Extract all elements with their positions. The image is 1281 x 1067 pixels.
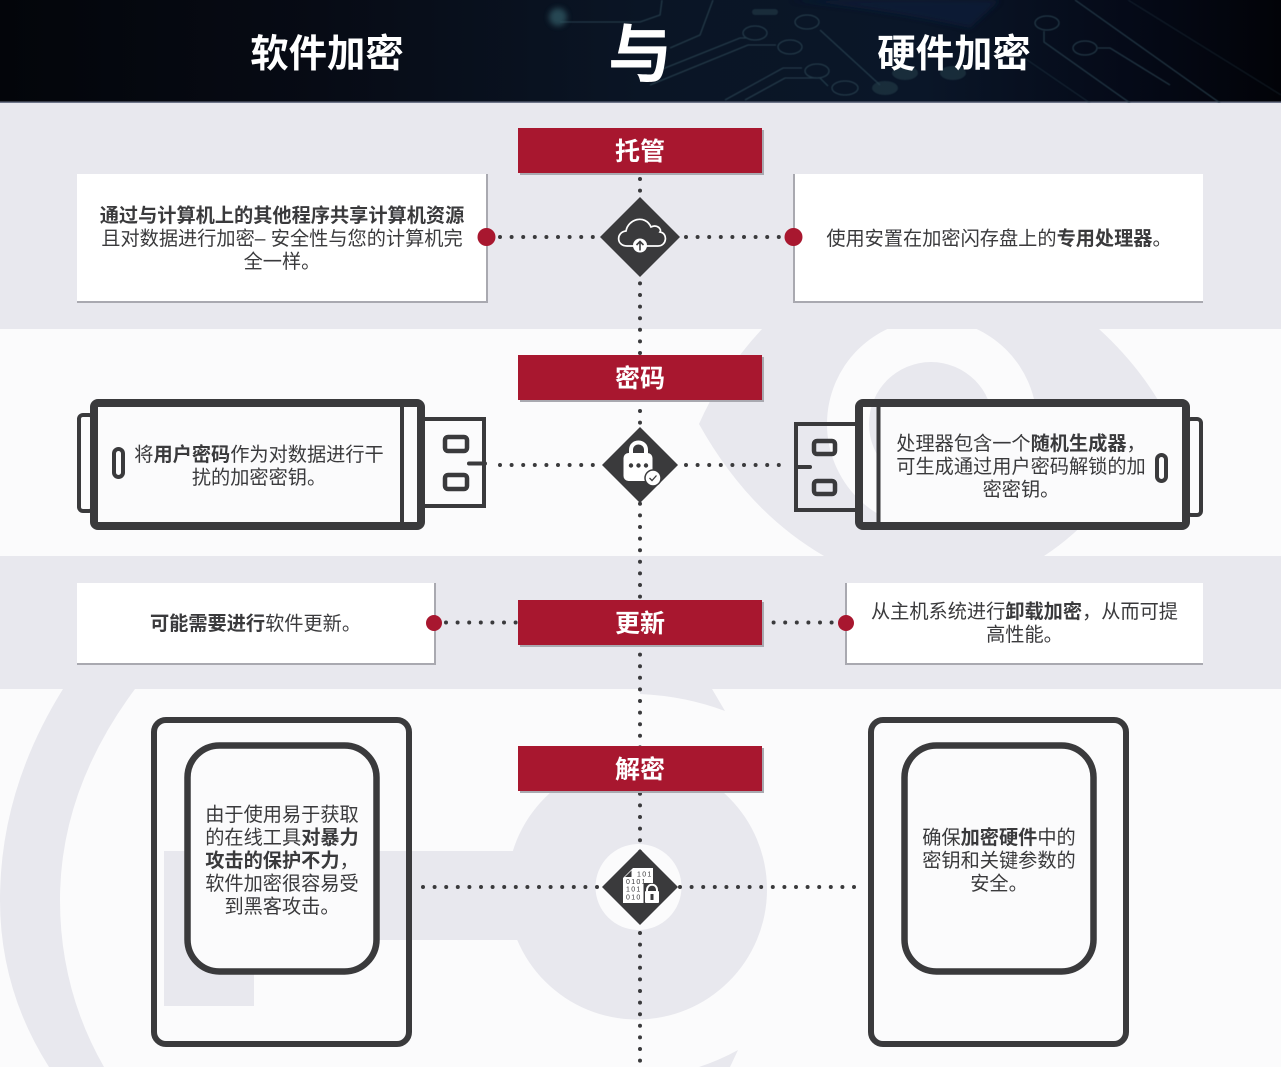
text: hosting hardware: 使用安置在加密闪存盘上的专用处理器。 <box>826 229 1172 250</box>
text: hardware decryption: 密钥和关键参数的 <box>922 850 1076 872</box>
banner: decryption: 解密 <box>615 756 665 784</box>
text: software password: 将用户密码作为对数据进行干 <box>134 444 384 466</box>
panel: update software <box>77 583 436 664</box>
usb drive: hardware password <box>794 399 1203 530</box>
text: software decryption: 软件加密很容易受 <box>205 874 359 894</box>
banner: password: 密码 <box>615 365 665 393</box>
icon: binary file lock diamond: 101 <box>637 872 653 878</box>
panel: software decryption device <box>151 717 412 1047</box>
text: hardware decryption: 安全。 <box>970 874 1028 894</box>
icon: cloud upload diamond <box>600 197 680 277</box>
icon: binary file lock diamond: 010 <box>626 894 642 902</box>
icon: binary file lock diamond <box>602 849 678 925</box>
text: hosting software: 且对数据进行加密– 安全性与您的计算机完 <box>101 229 463 250</box>
panel: hardware decryption device <box>868 717 1129 1047</box>
banner: hosting <box>518 128 762 173</box>
icon: lock diamond <box>602 427 678 502</box>
title: hardware encryption: 硬件加密 <box>877 33 1031 76</box>
text: update software: 可能需要进行软件更新。 <box>150 614 361 635</box>
text: hosting software: 全一样。 <box>244 252 320 273</box>
text: update hardware <box>871 601 1178 646</box>
text: hardware decryption: 确保加密硬件中的 <box>922 828 1076 848</box>
banner: update: 更新 <box>615 610 665 638</box>
icon: binary file lock diamond: 101 <box>626 886 642 894</box>
header band <box>0 0 1281 103</box>
panel: hosting software <box>77 174 488 303</box>
text: hardware decryption <box>922 827 1076 894</box>
text: software decryption: 到黑客攻击。 <box>224 896 340 918</box>
text: software decryption: 的在线工具对暴力 <box>205 828 359 848</box>
title: software encryption: 软件加密 <box>250 33 404 76</box>
text: software decryption: 由于使用易于获取 <box>205 804 359 826</box>
text: hardware password: 可生成通过用户密码解锁的加 <box>896 456 1146 478</box>
title: versus character: 与 <box>608 19 672 91</box>
text: hardware password: 密密钥。 <box>983 480 1059 500</box>
banner: password <box>518 355 762 400</box>
text: software password: 扰的加密密钥。 <box>192 468 326 488</box>
panel: hosting hardware <box>792 174 1202 303</box>
banner: update <box>518 600 762 645</box>
text: hosting software: 通过与计算机上的其他程序共享计算机资源 <box>100 206 464 227</box>
text: hosting software <box>100 205 464 273</box>
icon: binary file lock diamond: 0101 <box>626 879 647 886</box>
text: hardware password <box>896 433 1146 500</box>
text: software decryption: 攻击的保护不力， <box>205 850 359 872</box>
banner: decryption <box>518 746 762 791</box>
text: software password <box>134 444 384 488</box>
panel: update hardware <box>844 583 1202 664</box>
usb drive: software password <box>77 399 487 530</box>
text: software decryption <box>205 804 359 918</box>
text: update hardware: 从主机系统进行卸载加密，从而可提 <box>871 602 1178 623</box>
banner: hosting: 托管 <box>615 138 665 166</box>
text: update hardware: 高性能。 <box>986 625 1063 646</box>
text: hardware password: 处理器包含一个随机生成器， <box>896 434 1146 454</box>
